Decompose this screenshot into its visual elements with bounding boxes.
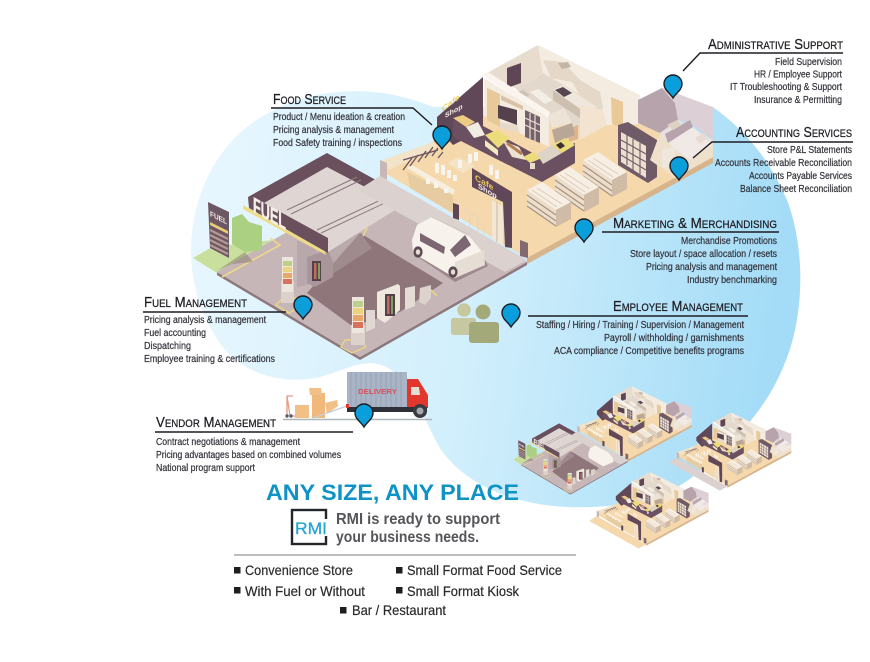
tagline: your business needs. (336, 529, 479, 546)
callout: marketing and merchandising: Pricing analysis and management (646, 262, 777, 273)
callout: food service: Food Service (273, 91, 346, 108)
cafe wall (437, 77, 483, 145)
RMI logo: RMI (295, 519, 327, 538)
pin: vendor management (355, 404, 373, 427)
callout: employee management: Employee Management (613, 298, 743, 315)
callout: accounting services: Accounts Payable Services (749, 171, 852, 182)
pump island rear (276, 250, 333, 313)
coolers (618, 122, 657, 183)
callout: vendor management: National program support (156, 463, 255, 474)
format list: Small Format Kiosk (407, 583, 520, 599)
delivery truck and boxes: DELIVERY (358, 389, 397, 396)
small format site: kiosk (589, 472, 709, 548)
office and restroom (638, 88, 713, 178)
tagline: RMI is ready to support (336, 511, 501, 528)
pin: administrative support (664, 75, 682, 98)
callout: food service: Pricing analysis & management (273, 125, 394, 136)
callout: fuel management: Dispatching (144, 341, 191, 352)
shop floor (380, 70, 713, 258)
front service counter (453, 115, 575, 182)
canopy column and shadow (297, 233, 372, 287)
floor edge (527, 156, 713, 264)
pin: accounting services (670, 157, 688, 180)
callout: accounting services: Balance Sheet Reconciliation (740, 184, 852, 195)
callout: administrative support (683, 36, 843, 106)
callout: administrative support: Insurance & Permitting (754, 95, 842, 106)
callout: food service (271, 91, 432, 149)
callout: accounting services (693, 124, 853, 195)
rear wall cafe sign text: Shop (445, 102, 463, 120)
callout: marketing and merchandising: Merchandise Promotions (681, 236, 777, 247)
fuel station illustration (193, 153, 527, 360)
callout: fuel management: Fuel Management (144, 294, 247, 311)
pin: marketing (575, 219, 593, 242)
rear wall cafe sign text: Cafe (442, 92, 459, 114)
fuel price tower (208, 202, 229, 258)
callout: employee management: Staffing / Hiring / Training / Supervision / Management (536, 320, 744, 331)
hedge shadow (218, 252, 253, 270)
cafe entrance sign wall (453, 168, 528, 258)
lot base edge (217, 262, 527, 360)
callout: accounting services: Store P&L Statements (767, 145, 852, 156)
front cafe sign text: Cafe (475, 173, 493, 193)
front cafe sign text (475, 173, 497, 201)
canopy roof: FUEL (253, 193, 286, 236)
cafe seating (380, 142, 497, 213)
callout: administrative support: Field Supervision (775, 57, 842, 68)
callout: fuel management: Pricing analysis & management (144, 315, 266, 326)
callout: vendor management: Contract negotiations & management (156, 437, 300, 448)
format list (234, 562, 562, 618)
callout: food service: Food Safety training / inspections (273, 138, 402, 149)
RMI logo (292, 510, 330, 544)
format list: Bar / Restaurant (352, 602, 446, 618)
rear wall cafe sign text (442, 92, 463, 120)
pump island front (341, 284, 437, 353)
callout: vendor management: Vendor Management (156, 414, 276, 431)
small format site: store with fuel (513, 386, 692, 495)
canopy roof (243, 153, 403, 255)
tagline (336, 511, 501, 546)
callout: food service: Product / Menu ideation & creation (273, 112, 405, 123)
callout: vendor management (155, 414, 353, 474)
format list: With Fuel or Without (245, 583, 365, 599)
dark asphalt (307, 233, 443, 326)
fuel price tower: FUEL (210, 209, 227, 226)
sidewalk (358, 176, 527, 272)
kitchen room (482, 45, 640, 147)
pin: employee management (502, 304, 520, 327)
grass patch (193, 240, 273, 273)
callout: marketing and merchandising (602, 215, 779, 286)
white car (412, 217, 488, 282)
format list: Convenience Store (245, 562, 353, 578)
callout: fuel management: Fuel accounting (144, 328, 206, 339)
small format site: store without fuel (669, 412, 791, 491)
hedge (232, 214, 262, 252)
callout: fuel management: Employee training & certifications (144, 354, 275, 365)
pin: food service (433, 126, 451, 149)
callout: administrative support: Administrative Support (708, 36, 843, 53)
background blue blob (191, 91, 800, 507)
callout: employee management: Payroll / withholding / garnishments (604, 333, 744, 344)
callout: fuel management (143, 294, 286, 365)
callout: accounting services: Accounts Receivable Reconciliation (715, 158, 852, 169)
callout: administrative support: HR / Employee Support (754, 70, 842, 80)
pin: fuel management (294, 296, 312, 319)
callout: marketing and merchandising: Marketing & Merchandising (613, 215, 777, 232)
front cafe sign text: Shop (478, 182, 497, 201)
heading: any size any place: ANY SIZE, ANY PLACE (266, 480, 519, 505)
store floor plan illustration (358, 45, 713, 272)
format list: Small Format Food Service (407, 562, 562, 578)
callout: marketing and merchandising: Industry benchmarking (687, 275, 777, 286)
forecourt lot (217, 180, 527, 357)
parking lines (222, 212, 505, 277)
callout: vendor management: Pricing advantages based on combined volumes (156, 450, 341, 461)
callout: employee management (528, 298, 748, 357)
callout: administrative support: IT Troubleshooting & Support (730, 82, 842, 93)
shelving aisles (527, 152, 627, 227)
callout: employee management: ACA compliance / Competitive benefits programs (554, 346, 744, 357)
delivery truck and boxes (283, 372, 432, 420)
callout: marketing and merchandising: Store layout / space allocation / resets (630, 249, 777, 260)
employee icon (451, 303, 499, 343)
